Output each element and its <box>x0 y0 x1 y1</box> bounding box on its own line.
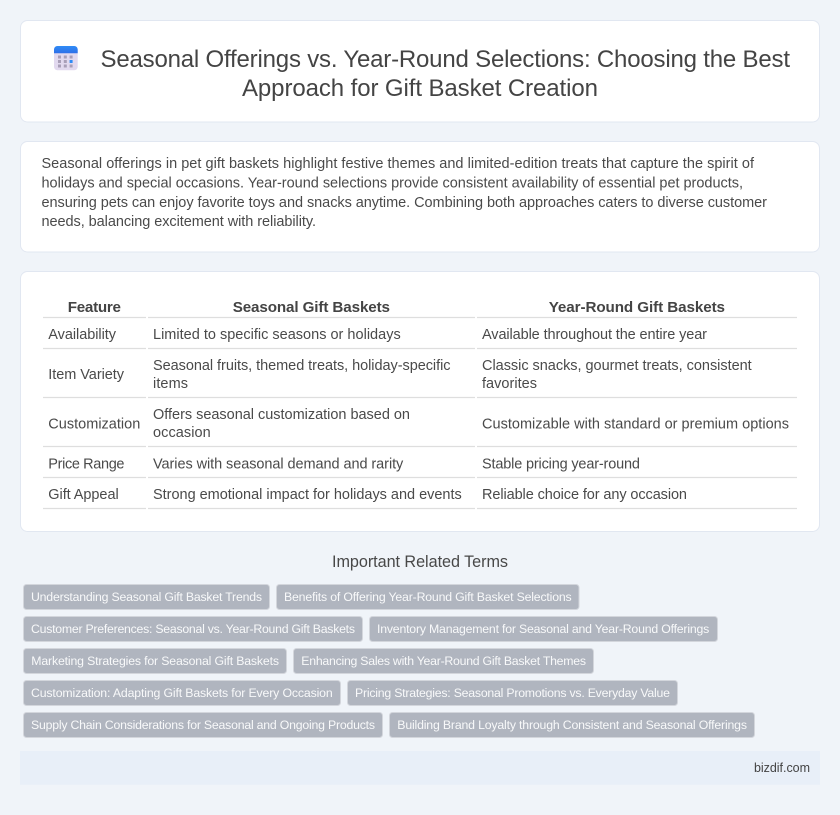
tag <box>24 680 340 706</box>
row: gift appeal: Strong emotional impact for holidays and events <box>153 487 462 503</box>
row: price range: Varies with seasonal demand and rarity <box>153 456 404 472</box>
icon: calendar <box>54 46 78 70</box>
tag: Understanding Seasonal Gift Basket Trends <box>31 590 262 604</box>
table header row: Seasonal Gift Baskets <box>233 299 390 316</box>
tag: Marketing Strategies for Seasonal Gift Baskets <box>31 654 279 668</box>
row: item variety: Classic snacks, gourmet treats, consistent <box>482 358 752 374</box>
row: gift appeal: Reliable choice for any occasion <box>482 487 687 503</box>
tag: Benefits of Offering Year-Round Gift Basket Selections <box>284 590 572 604</box>
footer source: bizdif.com <box>754 761 810 775</box>
row: item variety <box>48 358 752 392</box>
intro paragraph: holidays and special occasions. Year-round selections provide consistent availability of essential pet products, <box>42 175 743 191</box>
row: price range <box>48 456 640 472</box>
tag: Pricing Strategies: Seasonal Promotions vs. Everyday Value <box>355 686 670 700</box>
intro paragraph: Seasonal offerings in pet gift baskets highlight festive themes and limited-edition treats that capture the spirit of <box>42 156 755 172</box>
tag <box>24 712 382 738</box>
tag <box>24 616 362 642</box>
row: item variety: items <box>153 376 188 392</box>
row: item variety: Item Variety <box>48 367 125 383</box>
panel: introduction <box>20 142 820 252</box>
panel: title header <box>20 20 820 122</box>
tag <box>390 712 754 738</box>
table header row: Feature <box>68 299 121 316</box>
table header row <box>68 299 725 316</box>
title: Approach for Gift Basket Creation <box>242 75 598 102</box>
row: gift appeal: Gift Appeal <box>48 487 119 503</box>
row: price range: Stable pricing year-round <box>482 456 640 472</box>
row: customization <box>48 407 789 441</box>
tag: Customer Preferences: Seasonal vs. Year-Round Gift Baskets <box>31 622 355 636</box>
row: availability <box>48 327 707 343</box>
row: customization: Customization <box>48 416 140 432</box>
footer bar <box>20 751 820 785</box>
tag: Inventory Management for Seasonal and Year-Round Offerings <box>377 622 709 636</box>
panel: comparison table <box>20 272 820 532</box>
tag: Building Brand Loyalty through Consistent and Seasonal Offerings <box>397 718 747 732</box>
intro paragraph: needs, balancing excitement with reliability. <box>42 214 316 230</box>
intro paragraph: ensuring pets can enjoy favorite toys and snacks anytime. Combining both approaches caters to diverse customer <box>42 195 767 211</box>
row: customization: Offers seasonal customization based on <box>153 407 410 423</box>
row: availability: Availability <box>48 327 117 343</box>
row: gift appeal <box>48 487 687 503</box>
row: item variety: favorites <box>482 376 537 392</box>
row: item variety: Seasonal fruits, themed treats, holiday-specific <box>153 358 450 374</box>
table header row: Year-Round Gift Baskets <box>549 299 725 316</box>
title: Seasonal Offerings vs. Year-Round Selections: Choosing the Best <box>100 46 790 73</box>
tag <box>370 616 718 642</box>
row: availability: Limited to specific seasons or holidays <box>153 327 401 343</box>
title <box>100 46 790 102</box>
panel: related term tags <box>24 584 754 738</box>
tag <box>276 584 579 610</box>
row: customization: occasion <box>153 425 211 441</box>
heading: important related terms: Important Related Terms <box>332 553 508 571</box>
intro paragraph <box>42 156 767 230</box>
row: price range: Price Range <box>48 456 124 472</box>
tag: Enhancing Sales with Year-Round Gift Basket Themes <box>301 654 586 668</box>
tag: Customization: Adapting Gift Baskets for Every Occasion <box>31 686 333 700</box>
tag <box>294 648 594 674</box>
row: customization: Customizable with standard or premium options <box>482 416 789 432</box>
tag <box>348 680 678 706</box>
tag <box>24 584 270 610</box>
tag: Supply Chain Considerations for Seasonal and Ongoing Products <box>31 718 375 732</box>
row: availability: Available throughout the entire year <box>482 327 707 343</box>
tag <box>24 648 286 674</box>
